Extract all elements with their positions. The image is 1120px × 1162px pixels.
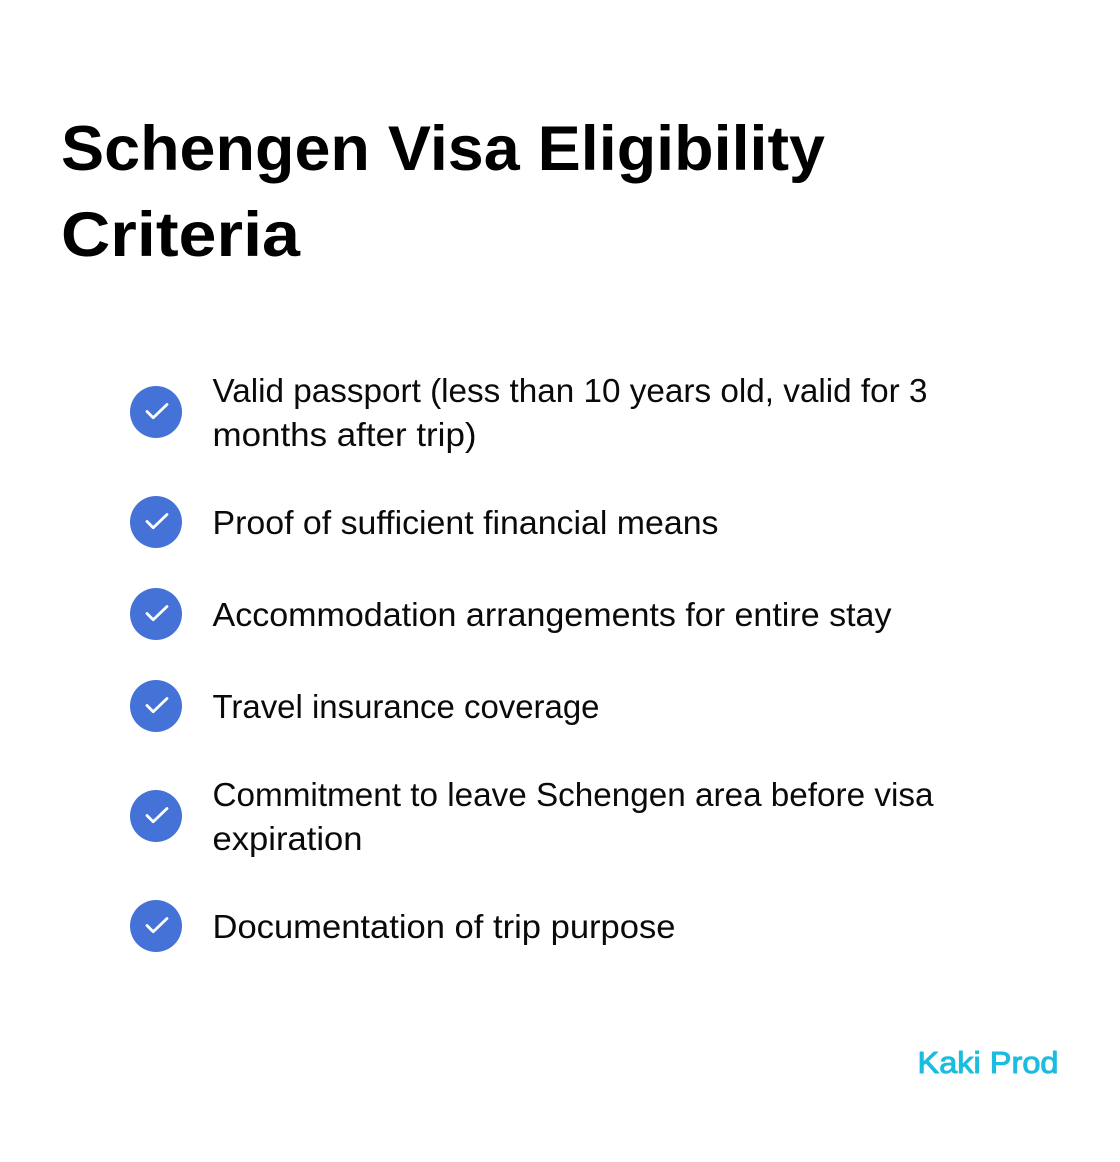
item: trip purpose: Documentation of trip purpose	[212, 908, 676, 945]
item: financial means: Proof of sufficient financial means	[212, 504, 718, 541]
logo: Kaki Prod	[918, 1045, 1058, 1080]
title: Criteria	[61, 200, 301, 270]
item: travel insurance: Travel insurance coverage	[212, 688, 600, 725]
item: commitment to leave	[130, 776, 934, 857]
item: commitment to leave: Commitment to leave Schengen area before visa	[212, 776, 934, 813]
checklist	[130, 372, 934, 952]
item: travel insurance	[130, 680, 600, 732]
title	[61, 114, 825, 270]
item: commitment to leave: expiration	[212, 820, 362, 857]
item: valid passport	[130, 372, 927, 453]
item: valid passport: months after trip)	[212, 416, 476, 453]
item: valid passport: Valid passport (less than 10 years old, valid for 3	[212, 372, 927, 409]
item: accommodation	[130, 588, 892, 640]
item: trip purpose	[130, 900, 676, 952]
title: Schengen Visa Eligibility	[61, 114, 825, 184]
item: financial means	[130, 496, 718, 548]
item: accommodation: Accommodation arrangements for entire stay	[212, 596, 892, 633]
